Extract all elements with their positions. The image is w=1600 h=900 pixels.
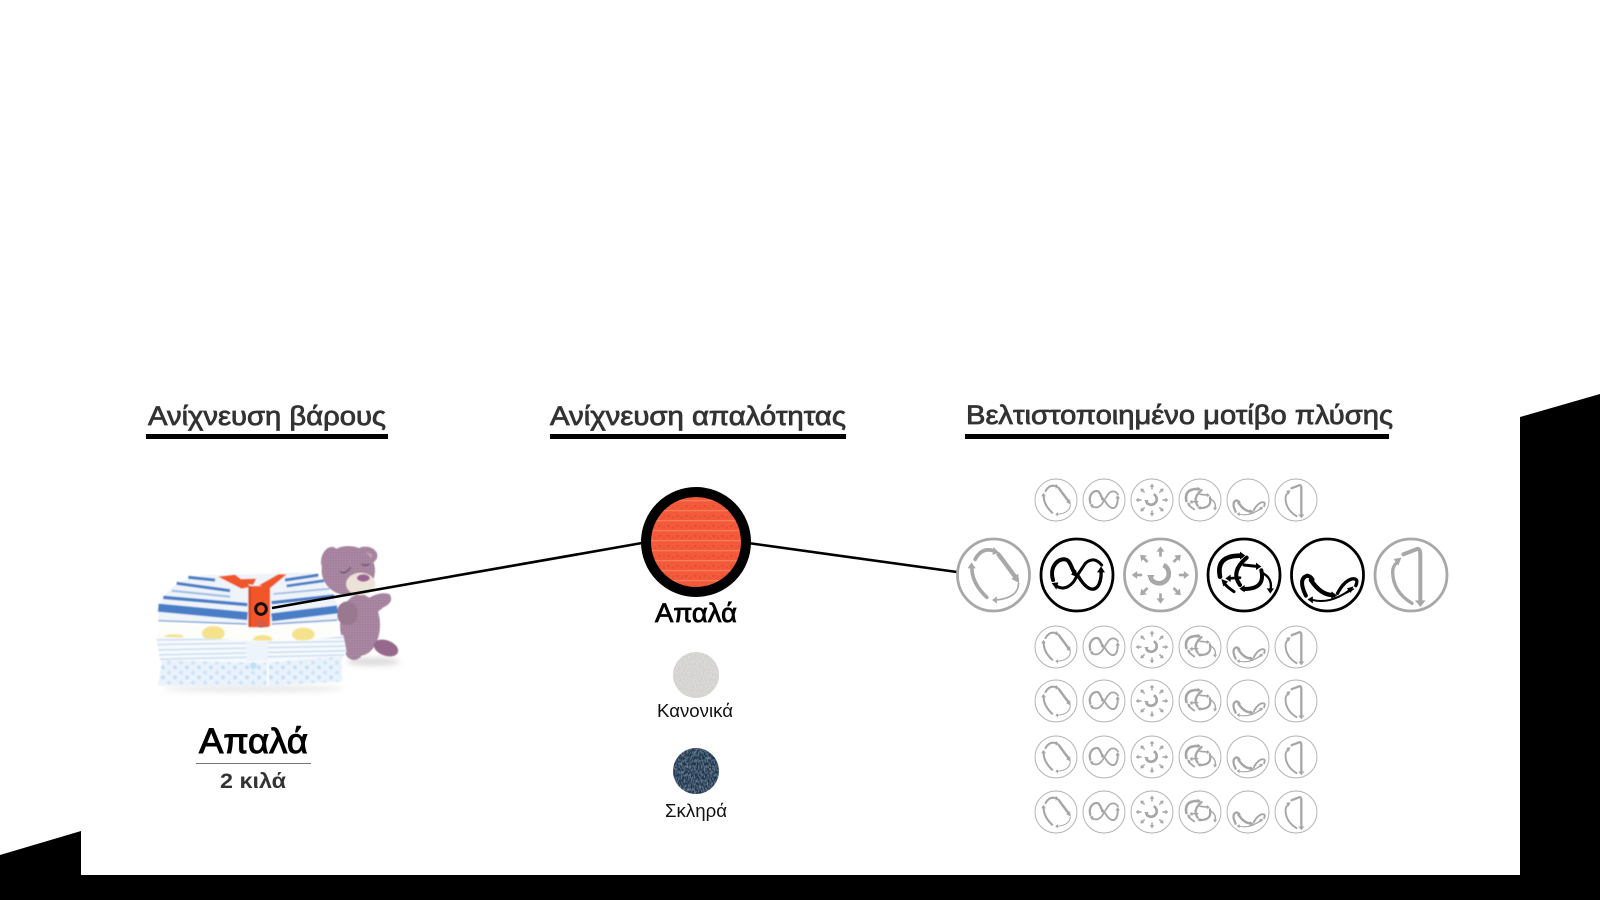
small wash pattern row 3 — [1035, 680, 1317, 722]
orange strap — [248, 586, 270, 627]
yellow dot garment — [158, 620, 338, 641]
heading: softness detection: Ανίχνευση απαλότητας — [550, 401, 846, 431]
illustration: folded baby clothes and teddy bear — [153, 545, 401, 692]
fabric swatch: normal — [673, 652, 719, 698]
heading: optimised wash pattern: Βελτιστοποιημένο μοτίβο πλύσης — [966, 400, 1393, 430]
icon: pattern 3 inactive — [1124, 539, 1196, 611]
striped garment — [156, 635, 347, 662]
selected fabric swatch: soft — [646, 492, 746, 592]
icon: pattern 4 active — [1208, 539, 1280, 611]
small wash pattern row 1 — [1035, 479, 1317, 521]
bottom garment — [158, 656, 342, 686]
small wash pattern row 5 — [1035, 791, 1317, 833]
label: soft fabric: Απαλά — [655, 598, 737, 628]
icon: pattern 2 active — [1041, 539, 1113, 611]
label: soft load: Απαλά — [199, 722, 308, 761]
top striped shirt — [158, 573, 337, 626]
label: hard fabric: Σκληρά — [665, 801, 727, 821]
background black corner shape — [0, 394, 1600, 900]
heading: weight detection: Ανίχνευση βάρους — [148, 401, 386, 431]
small wash pattern row 2 — [1035, 626, 1317, 668]
label: normal fabric: Κανονικά — [657, 701, 733, 721]
label: 2 kilos: 2 κιλά — [220, 770, 286, 793]
orange collar — [218, 574, 287, 589]
teddy bear — [318, 545, 401, 660]
icon: pattern 5 active — [1292, 539, 1364, 611]
connector line: clothes to softness — [272, 543, 642, 608]
small wash pattern row 4 — [1035, 736, 1317, 778]
selected wash pattern row — [958, 539, 1447, 611]
icon: pattern 6 inactive — [1375, 539, 1447, 611]
fabric swatch: hard — [673, 748, 719, 794]
icon: pattern 1 inactive — [958, 539, 1030, 611]
connector line: softness to wash pattern — [748, 543, 957, 572]
